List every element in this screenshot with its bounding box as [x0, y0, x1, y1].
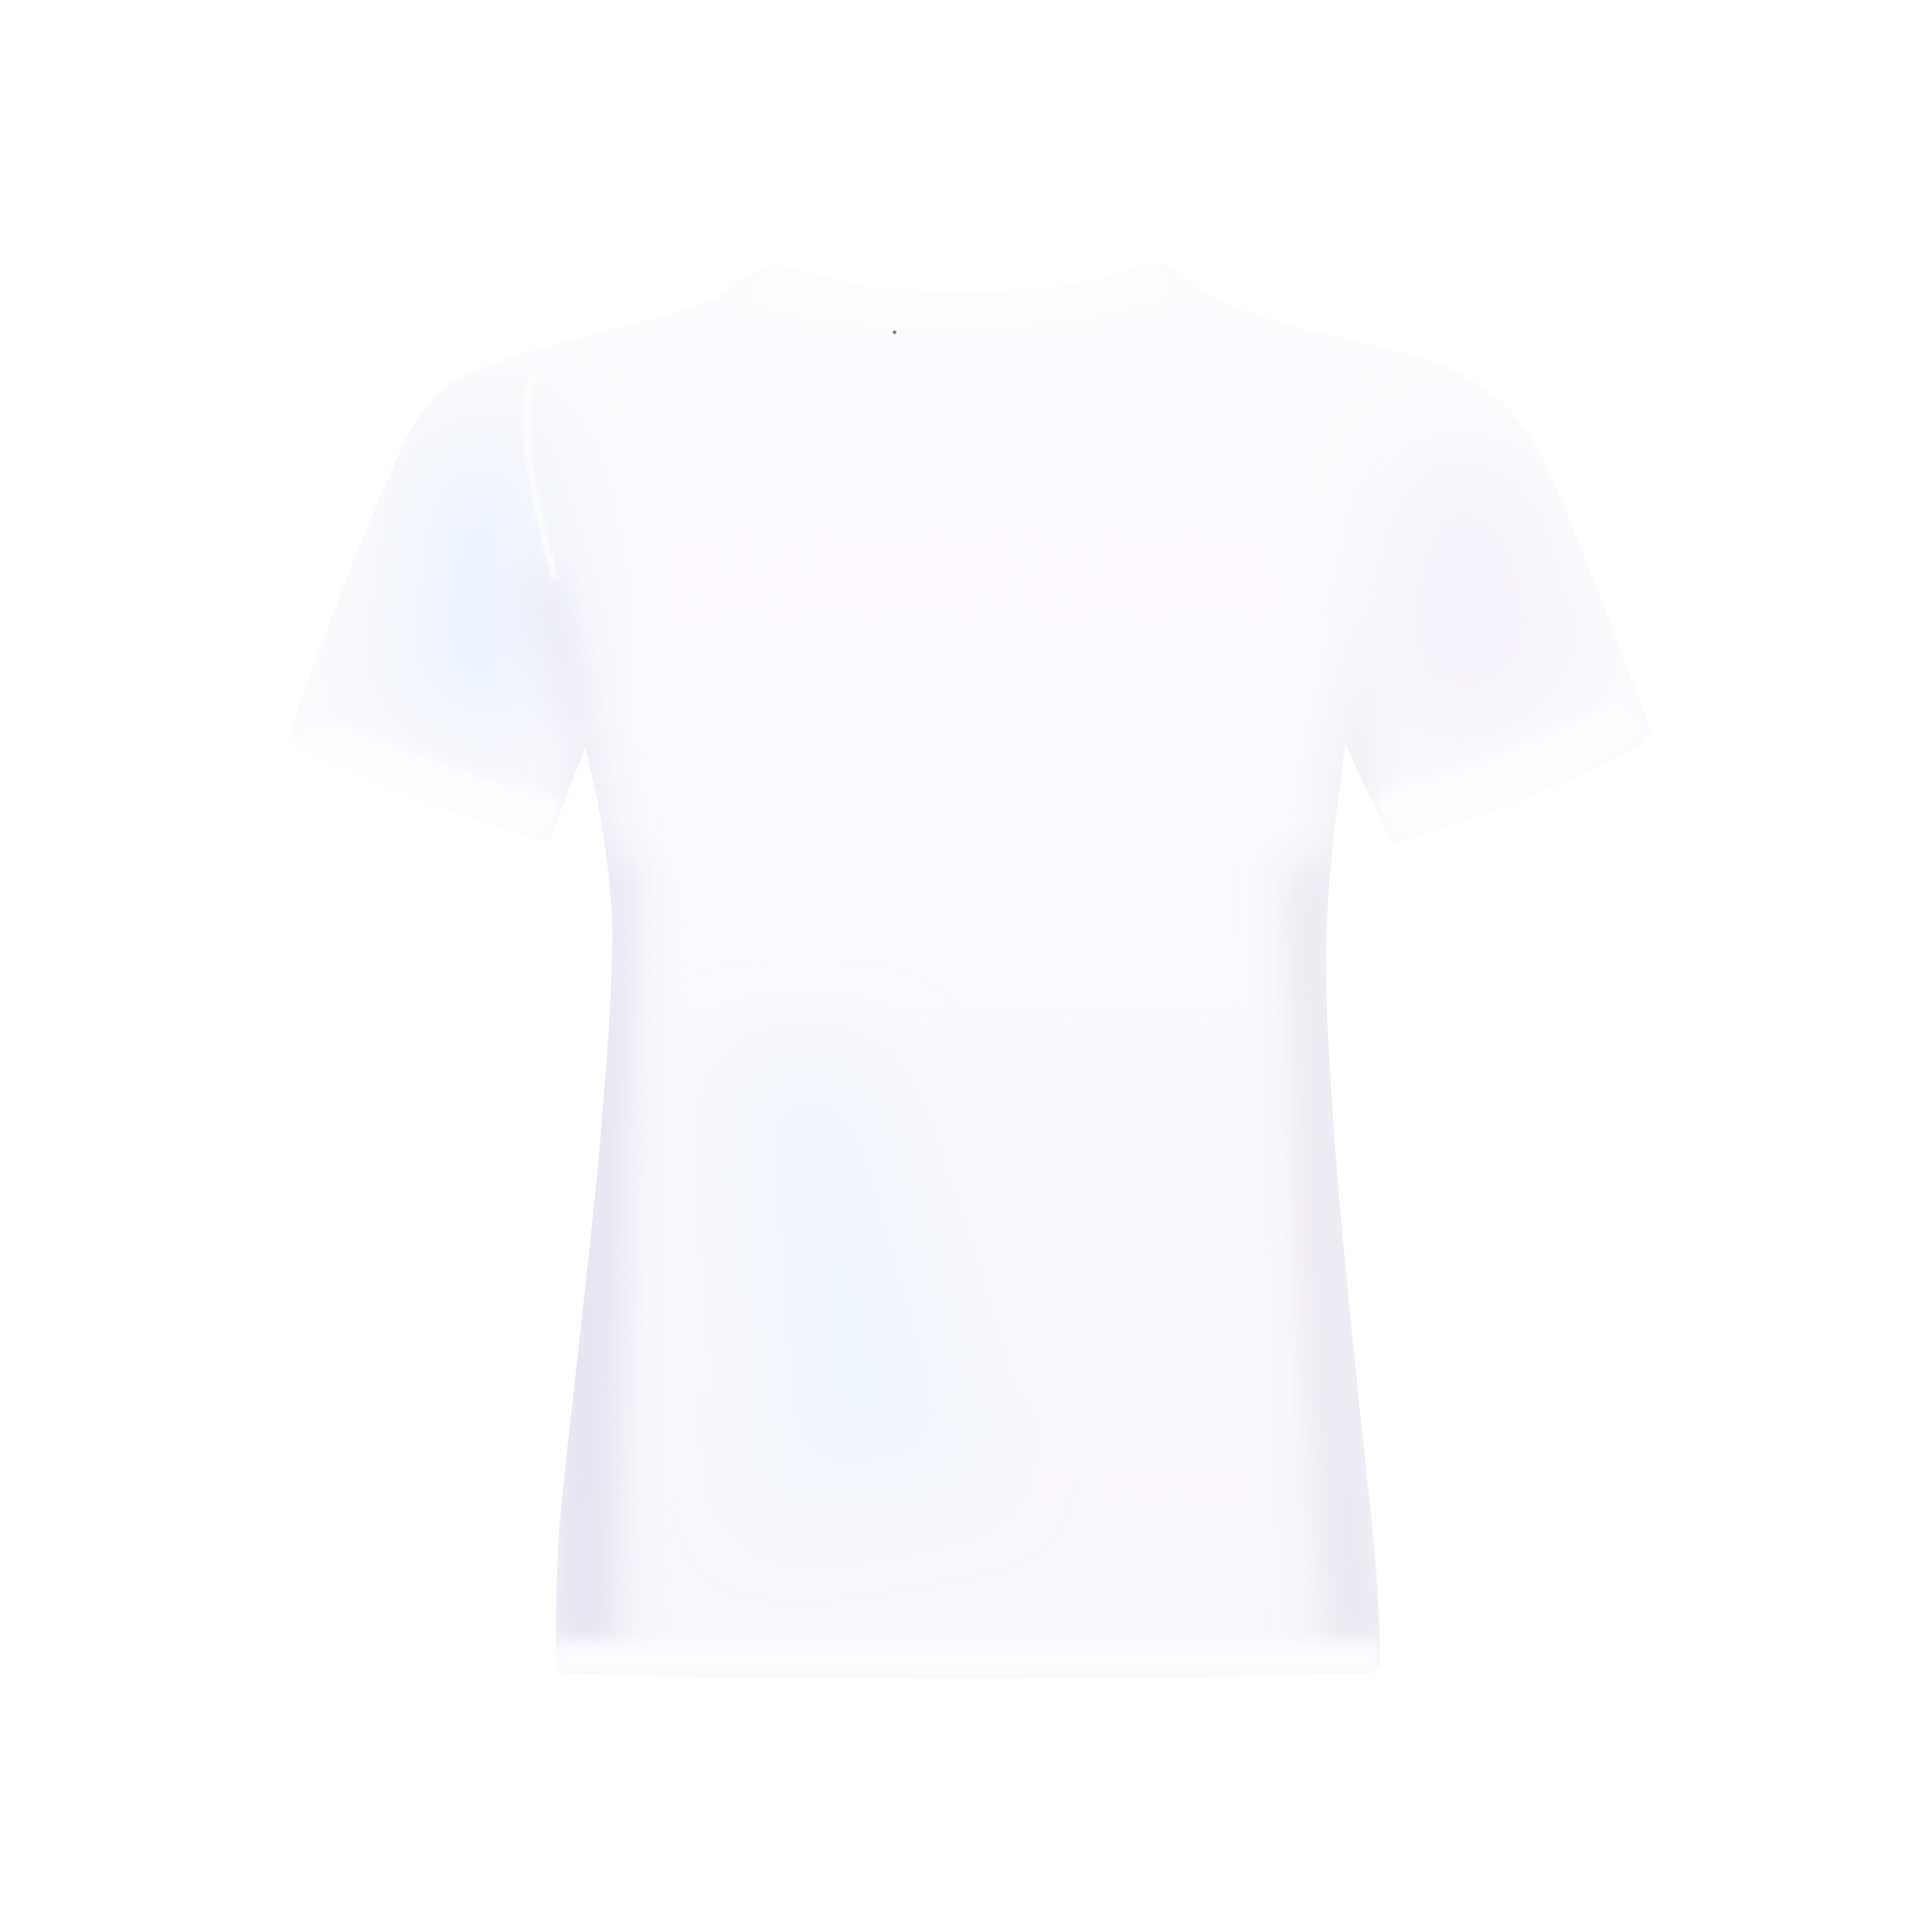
armhole shadow right: [1349, 739, 1365, 782]
lower left edge shading: [556, 873, 641, 1641]
lower body blue tint: [769, 1097, 922, 1451]
neck label dot: [893, 330, 896, 334]
right cuff highlight: [1372, 700, 1647, 840]
left sleeve tint: [407, 454, 539, 723]
right sleeve tint: [1449, 571, 1490, 644]
armhole shadow left: [551, 603, 611, 842]
collar band: [749, 263, 1174, 324]
shirt body: [377, 330, 1561, 1650]
left cuff highlight: [290, 720, 565, 840]
left raglan seam highlight: [537, 504, 556, 578]
illustration: white t-shirt back view: [377, 330, 1561, 1650]
hem highlight: [556, 1642, 1377, 1669]
lower right edge shading: [1285, 867, 1379, 1639]
